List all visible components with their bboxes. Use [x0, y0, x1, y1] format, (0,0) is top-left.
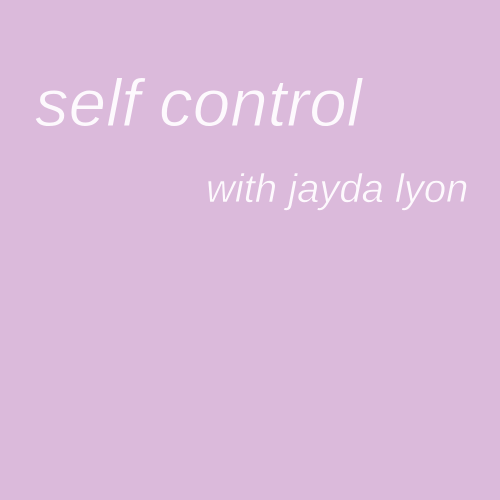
subtitle: with jayda lyon: [206, 167, 468, 211]
title: self control: [35, 66, 362, 141]
